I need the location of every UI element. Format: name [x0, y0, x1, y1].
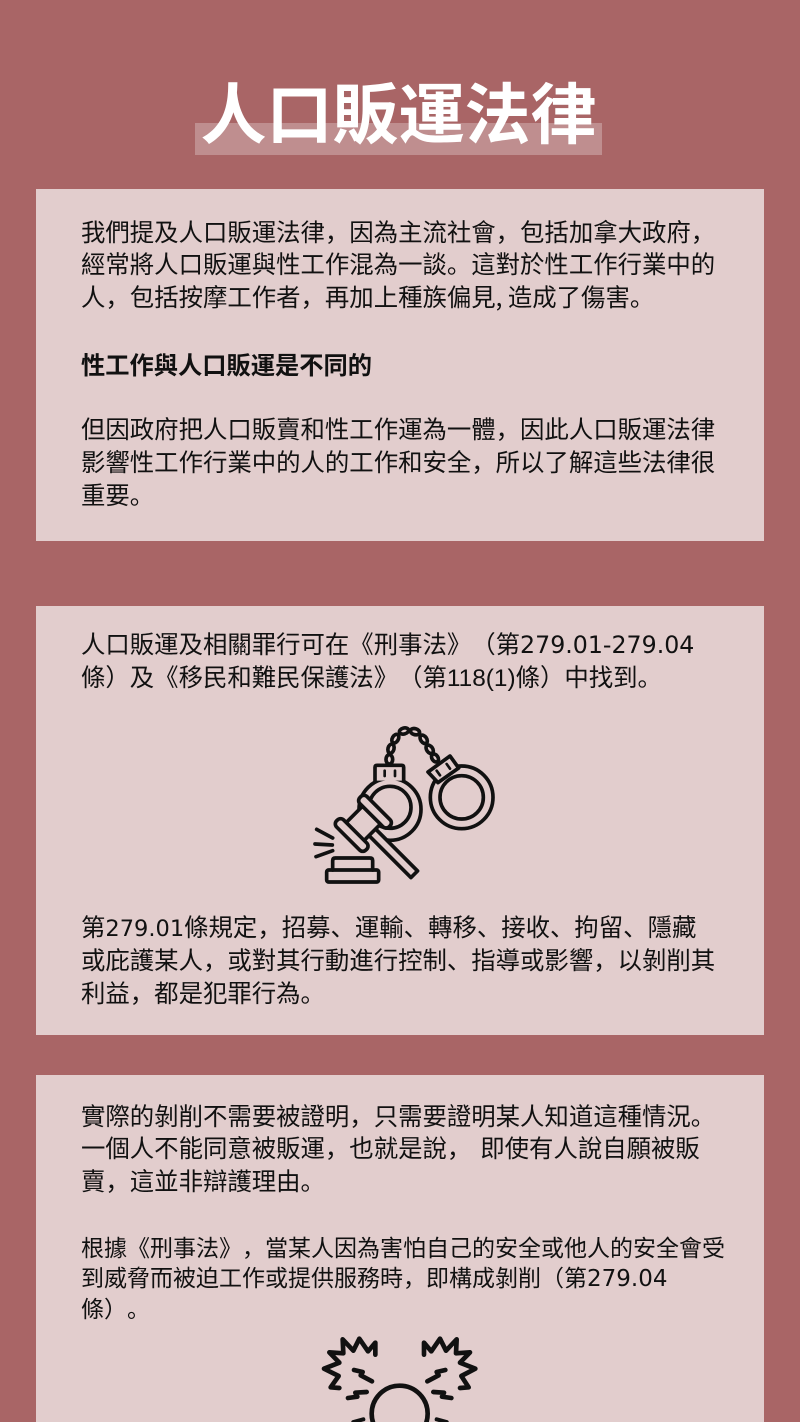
- panel: exploitation: [36, 1075, 764, 1422]
- text: consent and proof: 一個人不能同意被販運，也就是說， 即使有人說自願被販: [81, 1130, 700, 1165]
- text: introduction paragraph: [81, 214, 715, 314]
- text: section 279.01: 利益，都是犯罪行為。: [81, 975, 325, 1010]
- text: criminal code definition: 根據《刑事法》，當某人因為害怕自己的安全或他人的安全會受: [81, 1229, 725, 1263]
- text: section 279.01: [81, 909, 715, 1010]
- icon: head with stress bursts: [322, 1336, 478, 1422]
- text: introduction paragraph: 人，包括按摩工作者，再加上種族偏見, 造成了傷害。: [81, 279, 654, 314]
- text: introduction paragraph: 我們提及人口販運法律，因為主流社會，包括加拿大政府，: [81, 214, 715, 249]
- text: why the laws matter: 影響性工作行業中的人的工作和安全，所以了解這些法律很: [81, 444, 715, 479]
- text: section 279.01: 第279.01條規定，招募、運輸、轉移、接收、拘留、隱藏: [81, 909, 696, 944]
- text: section 279.01: 或庇護某人，或對其行動進行控制、指導或影響，以剝削其: [81, 942, 715, 977]
- text: where offences are found: 條）及《移民和難民保護法》（第118(1)條）中找到。: [81, 659, 662, 694]
- text: consent and proof: 實際的剝削不需要被證明，只需要證明某人知道這種情況。: [81, 1098, 715, 1133]
- panel: legal sources: [36, 606, 764, 1035]
- text: introduction paragraph: 經常將人口販運與性工作混為一談。這對於性工作行業中的: [81, 246, 715, 281]
- text: where offences are found: 人口販運及相關罪行可在《刑事法》（第279.01-279.04: [81, 626, 694, 661]
- text: criminal code definition: 條）。: [81, 1290, 150, 1324]
- panel: introduction: [36, 189, 764, 541]
- text: why the laws matter: 重要。: [81, 477, 154, 512]
- title: 人口販運法律: [200, 62, 596, 158]
- text: where offences are found: [81, 626, 694, 694]
- text: why the laws matter: 但因政府把人口販賣和性工作運為一體，因此人口販運法律: [81, 411, 715, 446]
- icon: gavel and handcuffs: [313, 726, 495, 884]
- text: why the laws matter: [81, 411, 715, 512]
- heading: sex work differs from trafficking: 性工作與人口販運是不同的: [81, 346, 372, 381]
- text: consent and proof: 賣，這並非辯護理由。: [81, 1163, 325, 1198]
- text: criminal code definition: 到威脅而被迫工作或提供服務時，即構成剝削（第279.04: [81, 1259, 667, 1293]
